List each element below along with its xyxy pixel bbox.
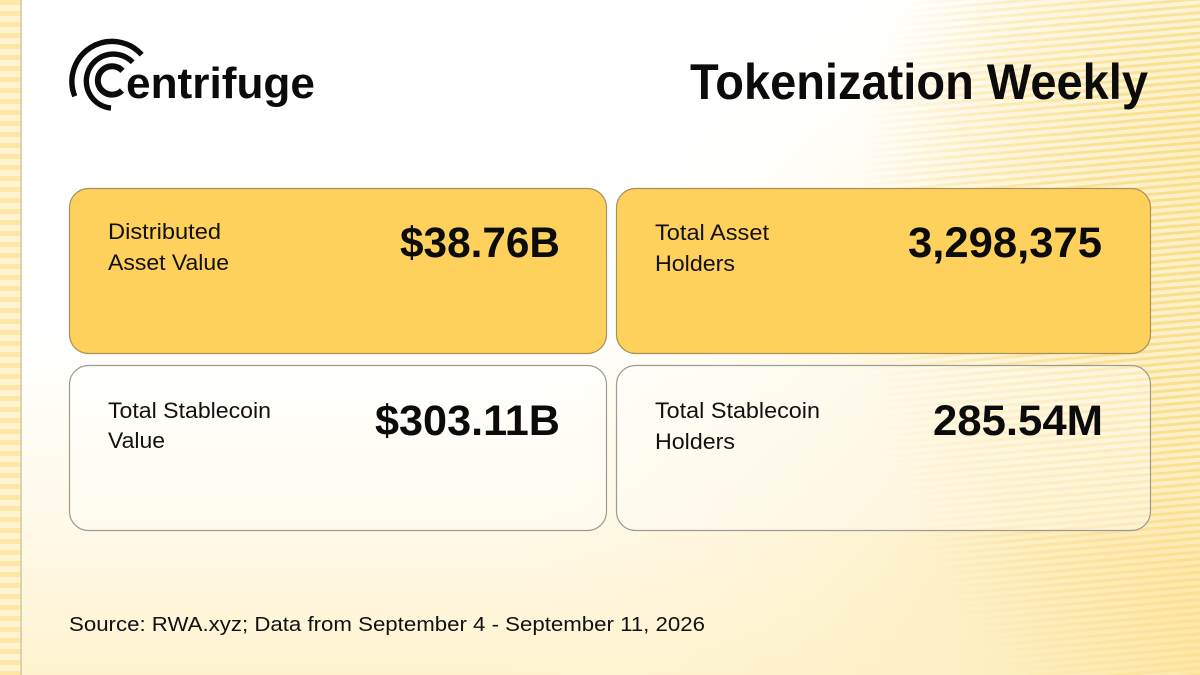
label: Asset Value	[108, 250, 229, 275]
wordmark: entrifuge	[126, 59, 315, 108]
label: Distributed	[108, 219, 221, 244]
left stripe band	[0, 0, 22, 675]
panel: total stablecoin holders	[616, 366, 1150, 530]
source note: Source: RWA.xyz; Data from September 4 - September 11, 2026	[69, 614, 705, 636]
title: Tokenization Weekly	[690, 54, 1148, 110]
label: Total Stablecoin	[108, 398, 271, 423]
label: Total Asset	[655, 220, 769, 245]
value: $303.11B	[375, 397, 560, 445]
label: Holders	[655, 429, 735, 454]
label: Holders	[655, 251, 735, 276]
label: Total Stablecoin	[655, 398, 820, 423]
panel: distributed asset value	[70, 188, 606, 354]
label: Value	[108, 428, 165, 453]
logo: Centrifuge	[72, 41, 315, 108]
icon: concentric arcs	[72, 41, 142, 108]
panel: total stablecoin value	[70, 366, 606, 530]
value: 3,298,375	[908, 219, 1102, 267]
value: 285.54M	[933, 397, 1103, 445]
panel: total asset holders	[616, 188, 1150, 354]
value: $38.76B	[400, 219, 560, 267]
